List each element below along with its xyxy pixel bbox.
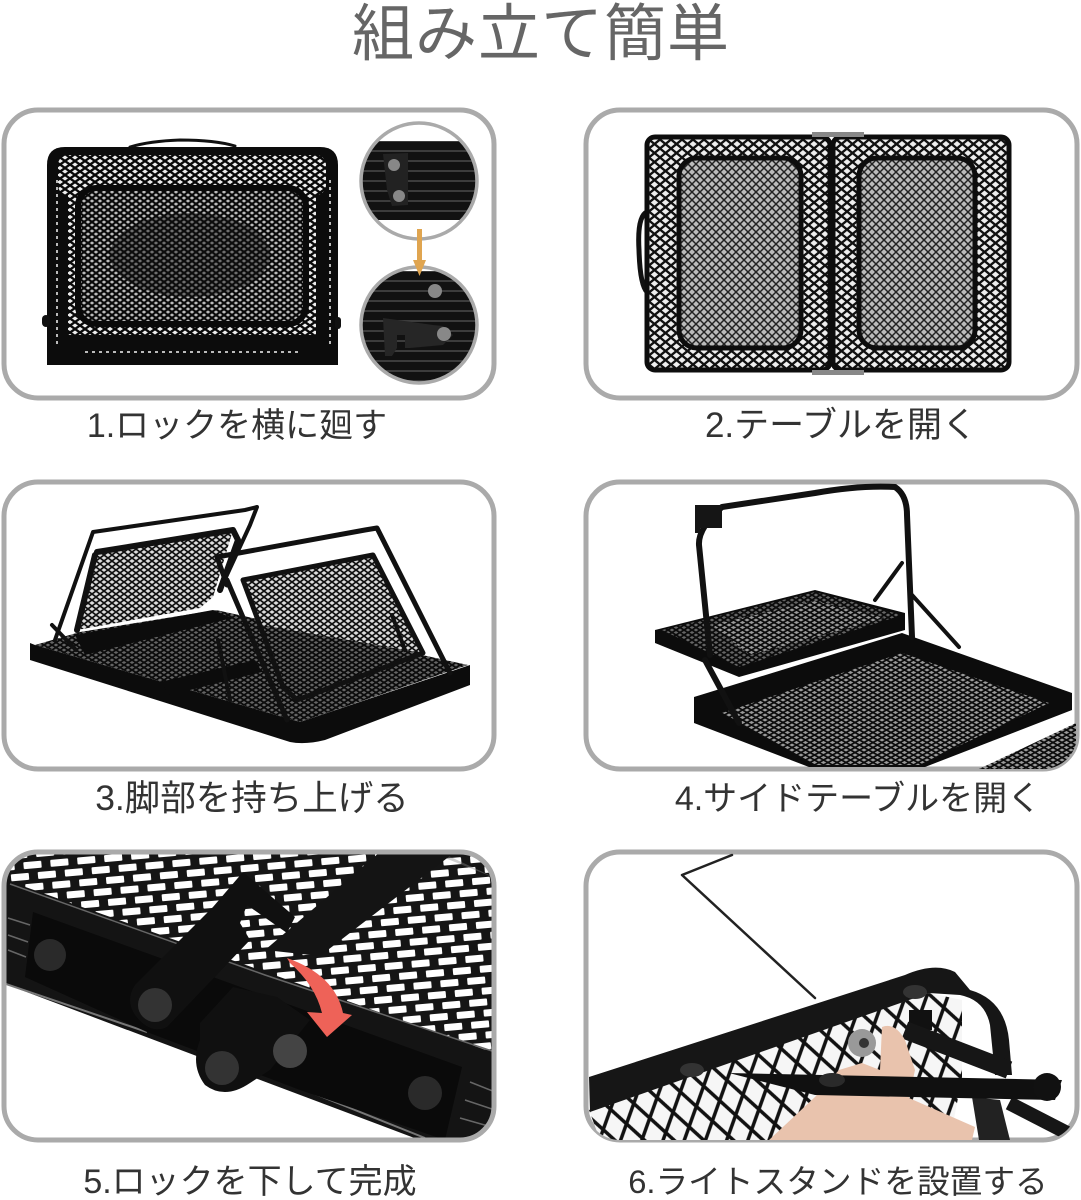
caption 6: 6.ライトスタンドを設置する: [628, 1163, 1048, 1200]
caption 5: 5.ロックを下して完成: [83, 1163, 417, 1200]
caption 2: 2.テーブルを開く: [705, 406, 977, 445]
folded table photo: [42, 140, 341, 365]
arrow: down: [413, 229, 426, 276]
side table photo: [655, 487, 1076, 769]
arrow: red curved: [287, 958, 352, 1037]
panel: step 4: [586, 482, 1077, 769]
inset: lock closed: [360, 141, 478, 220]
panel: step 1: [4, 110, 494, 398]
hand: [769, 1026, 975, 1140]
caption 1: 1.ロックを横に廻す: [87, 407, 387, 445]
legs lifted photo: [30, 507, 470, 743]
open table photo: [639, 132, 1009, 375]
panel: step 2: [586, 110, 1077, 398]
caption 3: 3.脚部を持ち上げる: [95, 778, 409, 818]
inset: lock turned: [360, 271, 478, 383]
light stand photo: [589, 855, 1075, 1140]
panel: step 5: [0, 852, 500, 1142]
lock closeup photo: [0, 852, 500, 1142]
caption 4: 4.サイドテーブルを開く: [675, 780, 1041, 818]
lock lever: [176, 872, 295, 963]
panel: step 6: [586, 852, 1077, 1140]
panel: step 3: [4, 482, 494, 769]
title: 組み立て簡単: [352, 0, 730, 69]
